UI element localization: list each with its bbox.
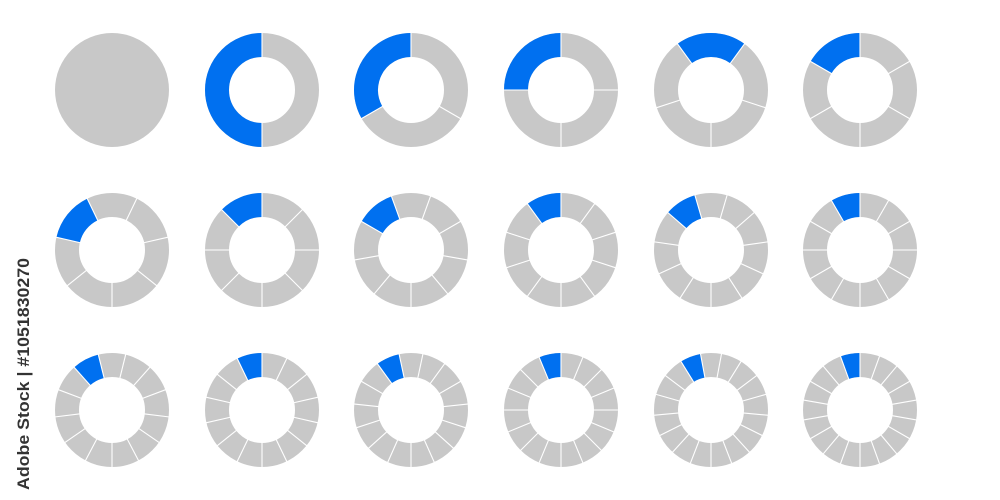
donut: 1 segment: [55, 33, 169, 147]
donut: 5 segments: [648, 27, 774, 153]
donut: 12 segments: [799, 189, 921, 311]
donut: 4 segments: [503, 32, 619, 148]
donut: 17 segments: [649, 348, 773, 472]
donut: 7 segments: [55, 196, 169, 308]
donut: 18 segments: [802, 352, 918, 468]
donut: 6 segments: [799, 29, 921, 151]
donut: 10 segments: [498, 187, 624, 313]
watermark label: Adobe Stock | #1051830270: [14, 258, 33, 490]
donut: 16 segments: [502, 351, 620, 469]
donut: 15 segments: [348, 347, 474, 473]
donut: 13 segments: [48, 346, 176, 474]
donut: 8 segments: [198, 186, 326, 314]
donut: 14 segments: [202, 350, 322, 470]
donut: 9 segments: [350, 189, 472, 311]
donut: 3 segments: [350, 29, 472, 151]
donut: 2 segments: [217, 32, 307, 148]
donut: 11 segments: [648, 187, 774, 313]
